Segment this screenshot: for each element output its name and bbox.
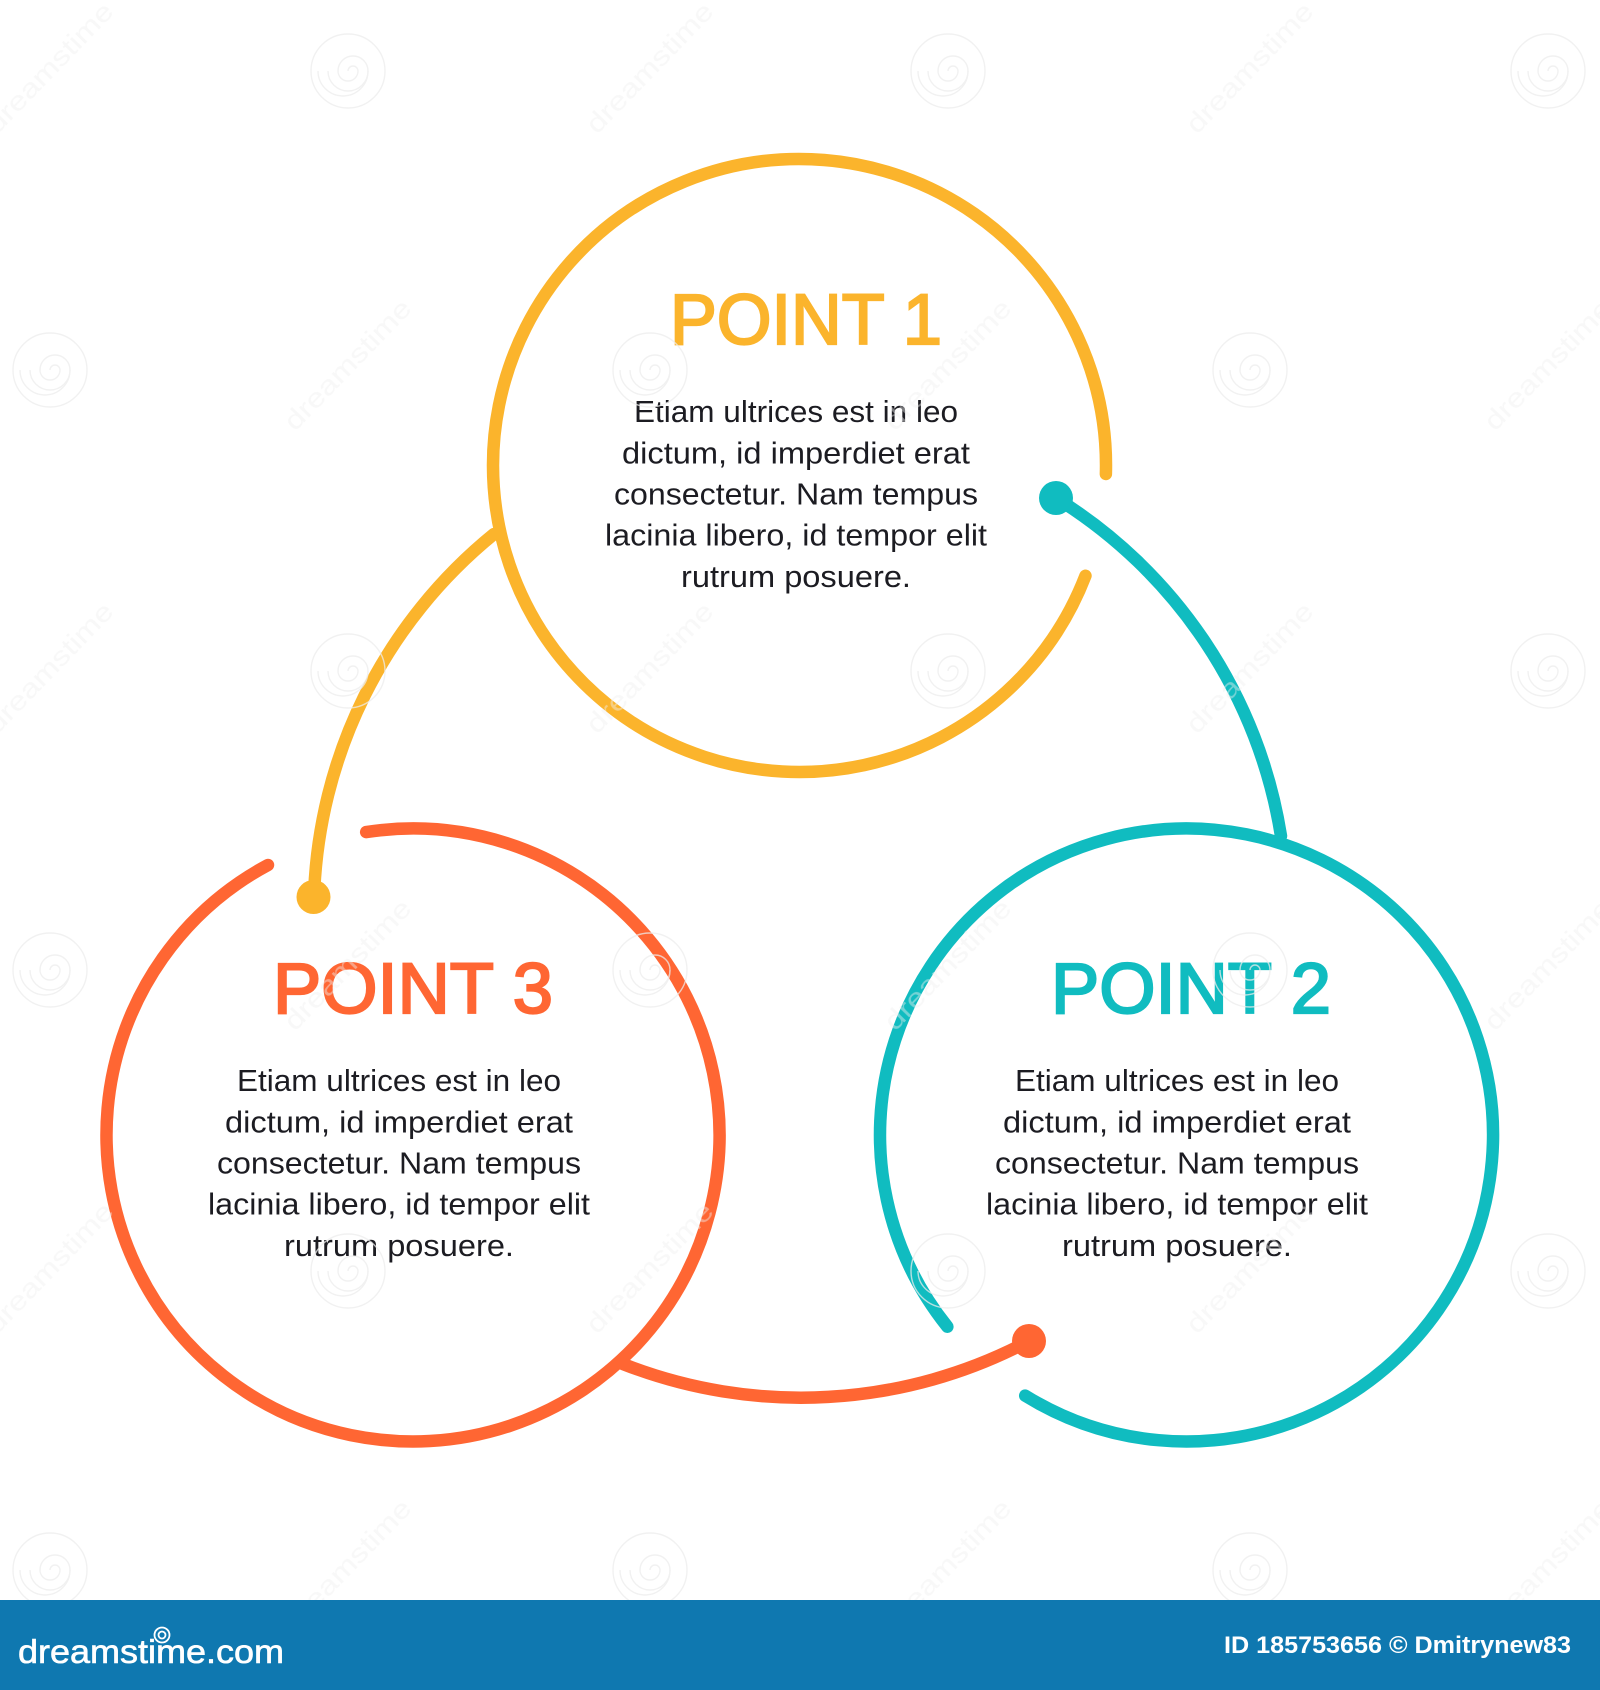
text block: point 2 body <box>986 1064 1369 1263</box>
text: dreamstime <box>1478 293 1600 436</box>
text: dreamstime <box>580 0 719 139</box>
text block: point 3 body: lacinia libero, id tempor elit <box>208 1188 591 1222</box>
panel: point 1 <box>493 159 1106 772</box>
text block: point 2 body: consectetur. Nam tempus <box>995 1146 1359 1180</box>
panel: point 3 <box>106 829 719 1442</box>
text block: point 2 body: rutrum posuere. <box>1062 1229 1292 1263</box>
text: dreamstime <box>878 1493 1017 1636</box>
image id and credit: ID 185753656 © Dmitrynew83 <box>1224 1632 1571 1659</box>
text: dreamstime <box>580 1196 719 1339</box>
text: dreamstime <box>1478 893 1600 1036</box>
text block: point 3 body: Etiam ultrices est in leo <box>237 1064 561 1098</box>
text block: point 3 body: rutrum posuere. <box>284 1229 514 1263</box>
text block: point 1 body: lacinia libero, id tempor elit <box>605 518 988 552</box>
ring: point 1 yellow open circle <box>493 159 1106 772</box>
text block: point 1 body: Etiam ultrices est in leo <box>634 395 958 429</box>
text block: point 1 body: dictum, id imperdiet erat <box>622 436 971 470</box>
text block: point 3 body: consectetur. Nam tempus <box>217 1146 581 1180</box>
text block: point 2 body: lacinia libero, id tempor elit <box>986 1188 1369 1222</box>
ring: point 2 teal open circle <box>880 828 1493 1441</box>
text: dreamstime <box>1478 1493 1600 1636</box>
text block: point 2 body: Etiam ultrices est in leo <box>1015 1064 1339 1098</box>
logo text: dreamstime.com: dreamstime.com <box>18 1633 284 1670</box>
text block: point 1 body <box>605 395 988 594</box>
text: dreamstime <box>1180 596 1319 739</box>
arrow: yellow connector from point 1 to point 3 <box>296 534 494 914</box>
text block: point 3 body: dictum, id imperdiet erat <box>225 1106 574 1140</box>
heading: point 3: POINT 3 <box>273 950 553 1029</box>
heading: point 2: POINT 2 <box>1051 950 1331 1029</box>
text block: point 2 body: dictum, id imperdiet erat <box>1003 1106 1352 1140</box>
banner background <box>0 1600 1600 1690</box>
text block: point 1 body: rutrum posuere. <box>681 560 911 594</box>
panel: footer banner <box>0 1600 1600 1690</box>
text: dreamstime <box>1180 0 1319 139</box>
text: dreamstime <box>278 293 417 436</box>
ring: point 3 orange open circle <box>106 829 719 1442</box>
arrow: teal connector from point 2 to point 1 <box>1039 481 1281 836</box>
text: dreamstime <box>580 596 719 739</box>
text: dreamstime <box>878 293 1017 436</box>
icon: logo spiral <box>154 1628 170 1642</box>
panel: point 2 <box>880 828 1493 1441</box>
text: dreamstime <box>278 893 417 1036</box>
text block: point 3 body <box>208 1064 591 1263</box>
heading: point 1: POINT 1 <box>670 281 942 360</box>
arrow: orange connector from point 3 to point 2 <box>623 1324 1046 1398</box>
text: dreamstime <box>878 893 1017 1036</box>
text block: point 1 body: consectetur. Nam tempus <box>614 478 978 512</box>
text: dreamstime <box>278 1493 417 1636</box>
text: dreamstime <box>1180 1196 1319 1339</box>
